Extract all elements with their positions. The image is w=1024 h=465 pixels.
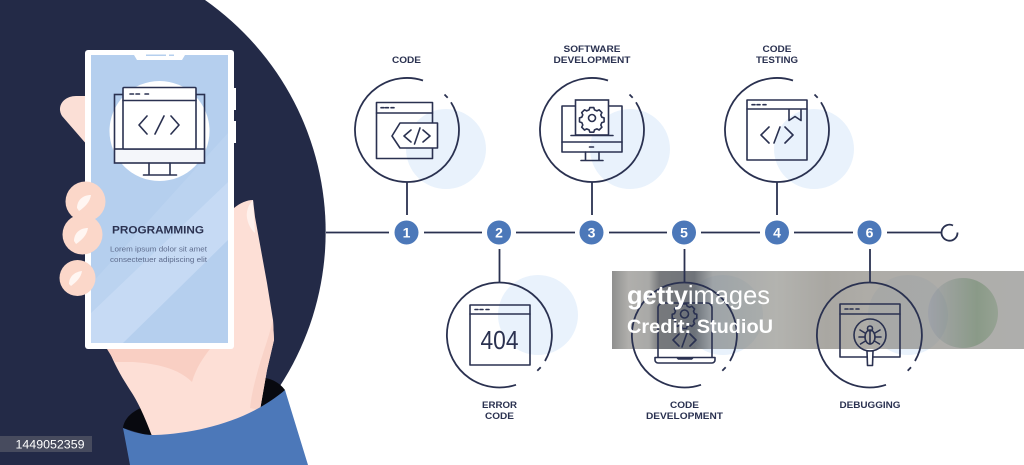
node 4 — [765, 220, 789, 244]
finger 3 — [60, 260, 96, 296]
hand palm — [107, 200, 274, 436]
label 1: CODE — [392, 54, 421, 65]
screen glare — [91, 133, 228, 313]
watermark logo text: gettyimages — [627, 280, 770, 310]
image id tag — [0, 436, 92, 452]
index finger behind phone — [60, 96, 88, 146]
label 2: ERROR — [482, 399, 517, 410]
label 5 line 2: DEVELOPMENT — [646, 410, 723, 421]
node 5: 5 — [680, 224, 688, 240]
icon: 404 window — [470, 305, 530, 365]
palm shadow — [107, 349, 210, 382]
phone body text: consectetuer adipiscing elit — [110, 255, 207, 264]
decorative circle 6 — [868, 275, 948, 355]
ring 1 — [355, 78, 459, 182]
watermark banner — [612, 271, 1024, 349]
ring 5 — [632, 282, 737, 387]
icon: window with code tag — [376, 102, 438, 158]
label 4: CODE — [762, 43, 792, 54]
step 5: code development — [632, 220, 763, 421]
label 3 line 2: DEVELOPMENT — [554, 54, 631, 65]
step 3: software development — [540, 43, 670, 244]
step 4: code testing — [725, 43, 854, 244]
node 5 — [672, 220, 696, 244]
illustration: hand holding phone — [60, 50, 308, 465]
node 3 — [580, 220, 604, 244]
node 4: 4 — [773, 224, 781, 240]
image id tag: 1449052359 — [16, 438, 85, 452]
label 2 line 2: CODE — [485, 410, 514, 421]
node 6 — [858, 220, 882, 244]
thumbnail highlight — [247, 200, 255, 233]
ring 2 — [447, 282, 552, 387]
phone heading: PROGRAMMING — [112, 224, 204, 236]
icon: 404 window: 404 — [480, 325, 518, 355]
node 2: 2 — [495, 224, 503, 240]
step 6: debugging — [817, 220, 948, 410]
phone body text — [110, 244, 207, 264]
icon: window with bookmark — [747, 100, 807, 160]
connector 6 — [869, 249, 871, 282]
decorative circle 2 — [498, 275, 578, 355]
watermark credit text: Credit: StudioU — [627, 316, 773, 338]
connector 4 — [776, 182, 778, 215]
timeline line — [326, 225, 958, 241]
icon: monitor with gear — [562, 100, 622, 160]
phone side buttons — [234, 88, 236, 143]
connector 3 — [591, 182, 593, 215]
label 3: SOFTWARE — [564, 43, 620, 54]
decorative circle 5 — [683, 275, 763, 355]
blue sleeve — [123, 390, 308, 465]
finger 1 — [66, 182, 106, 222]
ring 4 — [725, 78, 829, 182]
decorative circle 1 — [406, 109, 486, 189]
finger 2 — [62, 214, 102, 254]
node 1 — [394, 220, 418, 244]
hand side shadow — [250, 320, 274, 410]
timeline end ring — [942, 225, 958, 241]
node 1: 1 — [403, 224, 411, 240]
step 1: code — [355, 54, 486, 244]
icon: window with bug magnifier — [840, 304, 900, 366]
background dark circle — [0, 0, 326, 465]
node 3: 3 — [588, 224, 596, 240]
decorative circle 4 — [774, 109, 854, 189]
connector 1 — [406, 182, 408, 215]
phone screen — [91, 55, 228, 343]
black cuff opening — [123, 378, 285, 438]
ring 3 — [540, 78, 644, 182]
node 6: 6 — [866, 224, 874, 240]
screen bright glare — [91, 182, 228, 343]
label 6: DEBUGGING — [840, 399, 900, 410]
label 5: CODE — [670, 399, 699, 410]
connector 2 — [498, 249, 500, 282]
label 4 line 2: TESTING — [756, 54, 798, 65]
watermark circle — [928, 278, 998, 348]
ring 6 — [817, 282, 922, 387]
connector 5 — [684, 249, 686, 282]
step 2: error code — [447, 220, 578, 421]
phone body text: Lorem ipsum dolor sit amet — [110, 244, 207, 254]
phone speaker — [146, 54, 174, 56]
decorative circle 3 — [590, 109, 670, 189]
icon: monitor with code on phone — [110, 81, 210, 181]
watermark text — [627, 280, 773, 338]
icon: laptop with gear and code — [655, 303, 715, 363]
phone body — [85, 50, 234, 349]
node 2 — [487, 220, 511, 244]
